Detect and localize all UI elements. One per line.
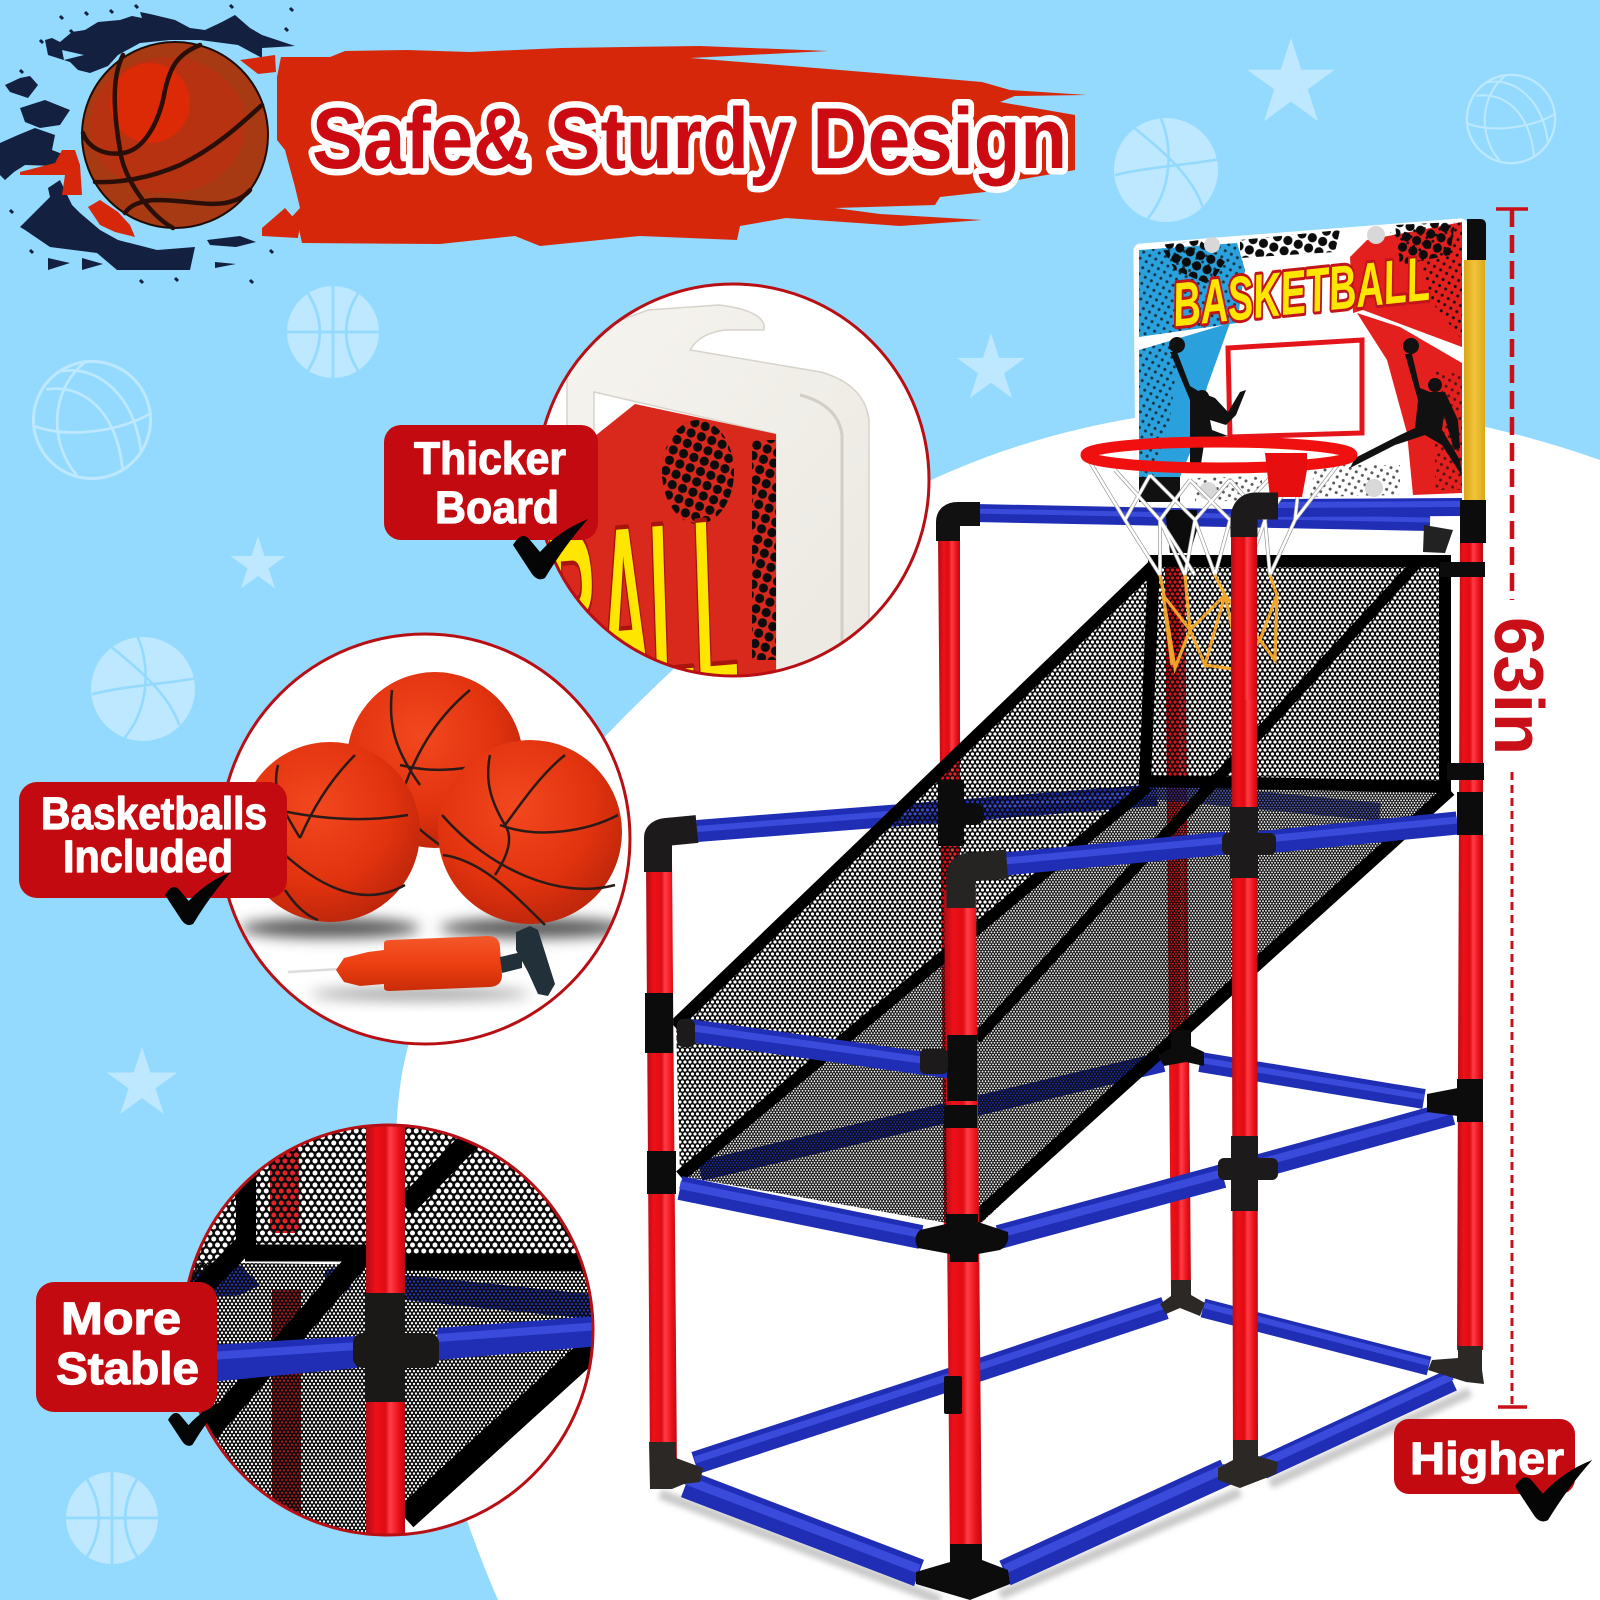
ground shadow [660,1392,1470,1600]
mesh netting panels with straps [674,561,1450,1228]
grunge splatter behind ball [0,5,300,283]
red brush banner [277,46,1087,246]
panel: stability lens [187,1124,594,1536]
thicker board callout [384,425,598,579]
hoop support [1165,510,1197,553]
basketballs included callout: Basketballs [41,788,267,839]
backboard wordmark: BASKETBALL [1169,245,1433,340]
higher callout: Higher [1410,1433,1564,1484]
backboard [1136,221,1465,502]
front elbow over net [1231,506,1278,700]
thicker board callout: Thicker [414,433,566,484]
rim [1086,442,1352,468]
back blue bars [695,511,1430,1463]
right pole top section [1464,219,1486,500]
icon: check [513,519,588,579]
icon: basketball [82,42,268,228]
height value: 63in [1480,617,1558,755]
back red poles behind net [938,535,1191,1290]
basketballs included callout: Included [63,831,233,882]
left ball [240,742,420,922]
panel: thicker board lens: BALL [534,466,748,761]
right ball [438,740,622,925]
thicker board callout: Board [435,482,559,533]
rim bracket [1265,453,1307,497]
icon: right player silhouette [1350,338,1462,476]
back ball [347,672,523,848]
icon: check [165,872,231,925]
more stable callout: Stable [56,1343,199,1394]
title: Safe& Sturdy Design [312,91,1067,187]
basketball hoop [1086,442,1352,670]
icon: left player silhouette [1169,337,1246,470]
more stable check [168,1400,225,1446]
height measure [1480,209,1558,1407]
net [1090,462,1340,670]
icon: check [1515,1460,1592,1522]
panel: thicker board lens [543,282,930,678]
more stable callout: More [61,1293,181,1344]
panel: basketballs lens [220,634,630,1044]
more stable callout [36,1282,217,1412]
front red poles [646,530,1483,1560]
higher callout [1394,1419,1592,1522]
frame connectors and joints [645,500,1486,1600]
pump [288,926,555,996]
front blue bars [680,504,1462,1573]
basketballs included callout [19,782,287,925]
